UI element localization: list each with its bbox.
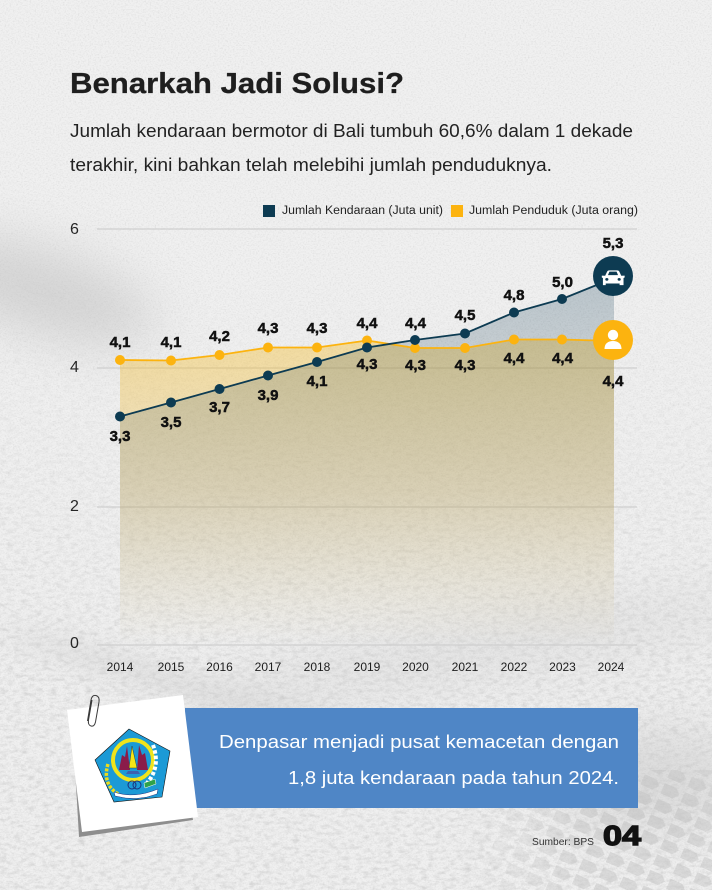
x axis years: 2017 [255,660,282,674]
title: Benarkah Jadi Solusi? [70,68,404,100]
page number: 04 [603,820,642,851]
description text: terakhir, kini bahkan telah melebihi jumlah penduduknya. [70,155,552,175]
value labels: lower series: 3,3 [110,428,130,445]
value labels: upper series: 4,5 [455,307,475,324]
callout banner [185,708,638,808]
x axis years: 2018 [304,660,331,674]
value labels: lower series: 4,3 [455,357,475,374]
x axis years: 2022 [501,660,528,674]
line chart: kendaraan vs penduduk 2014-2024 [70,221,637,674]
line: kendaraan [115,278,614,422]
value labels: lower series: 3,9 [258,387,278,404]
value labels: upper series: 4,8 [504,287,524,304]
gridlines and y axis: 2 [70,498,79,515]
callout banner: Denpasar menjadi pusat kemacetan dengan [219,731,619,752]
x axis years: 2020 [402,660,429,674]
value labels: lower series: 4,1 [307,373,327,390]
line: penduduk [115,334,614,366]
x axis years [107,660,625,674]
gridlines and y axis: 6 [70,221,79,238]
value labels: upper series: 4,3 [258,320,278,337]
value labels: upper series: 5,0 [552,274,573,291]
value labels: lower series: 4,4 [504,350,525,367]
x axis years: 2021 [452,660,479,674]
description text: Jumlah kendaraan bermotor di Bali tumbuh 60,6% dalam 1 dekade [70,121,633,141]
value labels: lower series: 3,7 [209,399,230,416]
value labels: lower series: 4,4 [603,373,624,390]
description text [70,121,633,175]
callout banner: 1,8 juta kendaraan pada tahun 2024. [288,767,619,788]
legend [263,205,638,217]
icon: paperclip [88,695,99,726]
area: kendaraan [120,278,614,645]
legend: Jumlah Penduduk (Juta orang) [469,205,638,217]
x axis years: 2024 [598,660,625,674]
source: Sumber: BPS [532,836,594,848]
icon: car [593,256,633,296]
x axis years: 2019 [354,660,381,674]
value labels: upper series: 4,2 [209,328,230,345]
value labels: upper series: 4,1 [161,334,181,351]
value labels: upper series: 4,3 [307,320,327,337]
gridlines and y axis: 4 [70,359,79,376]
x axis years: 2015 [158,660,185,674]
x axis years: 2023 [549,660,576,674]
area: penduduk [120,340,614,645]
x axis years: 2014 [107,660,134,674]
pinned note with logo [67,695,198,837]
value labels: upper series: 4,4 [357,315,378,332]
value labels: lower series: 4,3 [357,356,377,373]
value labels: upper series: 5,3 [603,235,623,252]
value labels: lower series: 3,5 [161,414,181,431]
gridlines and y axis [70,221,637,652]
value labels: lower series [110,350,624,445]
x axis years: 2016 [206,660,233,674]
value labels: upper series [110,235,623,351]
gridlines and y axis: 0 [70,635,79,652]
icon: person [593,320,633,360]
value labels: lower series: 4,3 [405,357,426,374]
value labels: lower series: 4,4 [552,350,574,367]
value labels: upper series: 4,4 [405,315,427,332]
legend: Jumlah Kendaraan (Juta unit) [282,205,443,217]
value labels: upper series: 4,1 [110,334,130,351]
icon: Denpasar crest [95,729,170,802]
